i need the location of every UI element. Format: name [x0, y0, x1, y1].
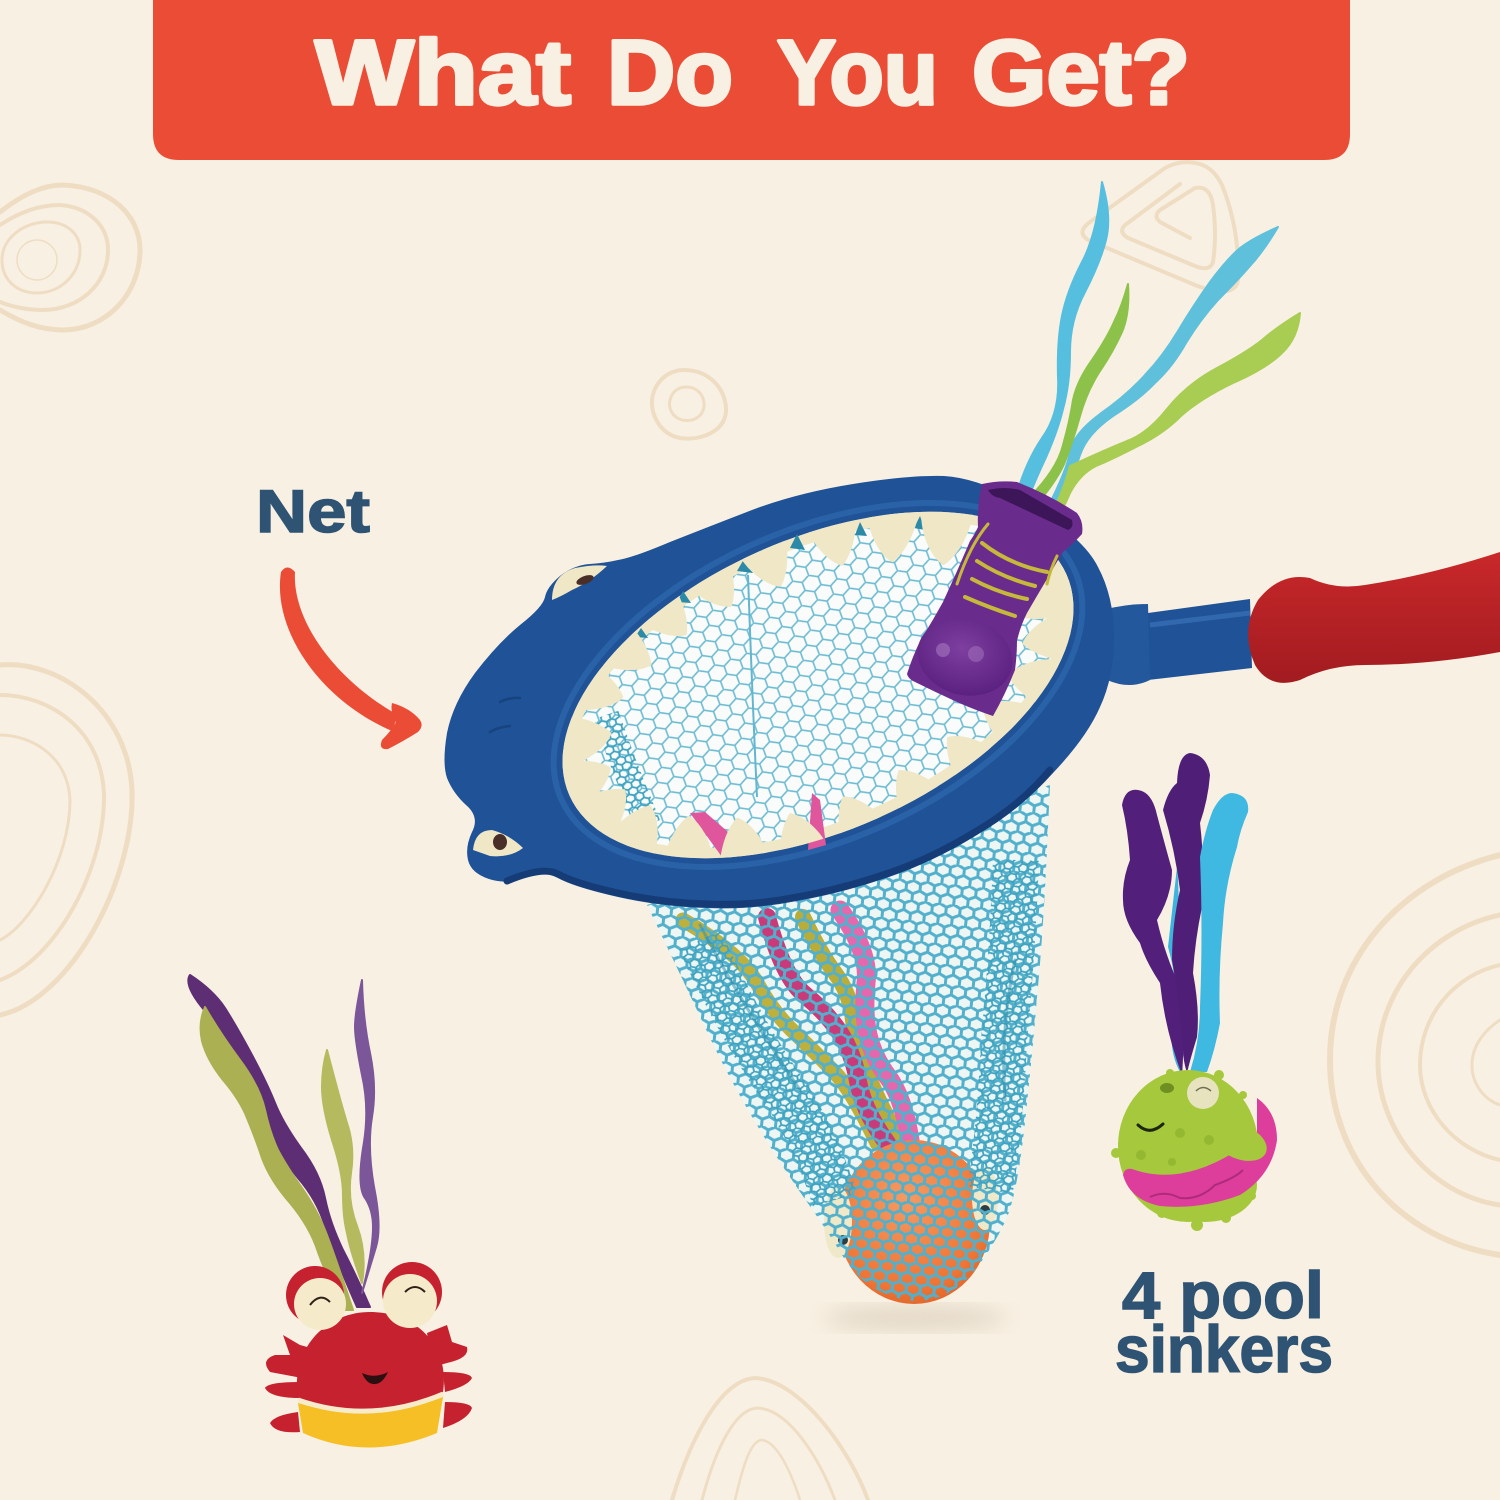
puffer fish sinker	[1111, 753, 1277, 1231]
boot laces	[957, 524, 1057, 616]
label: 4 pool sinkers: 4 pool	[1122, 1258, 1324, 1332]
header banner	[153, 0, 1350, 160]
boot streamers	[1015, 182, 1300, 518]
label: 4 pool sinkers: sinkers	[1115, 1312, 1333, 1386]
handle	[1101, 552, 1500, 685]
crab body	[297, 1312, 444, 1410]
shark ring	[444, 476, 1112, 908]
dense mesh folds	[700, 860, 1016, 1200]
teal gaps between teeth	[635, 516, 925, 638]
crab streamers	[188, 975, 379, 1310]
title: Get?	[972, 22, 1190, 124]
puffer fin	[1208, 1116, 1272, 1168]
puffer bumps	[1136, 1128, 1214, 1166]
teeth	[562, 512, 1074, 858]
snout dots	[490, 698, 520, 732]
boot toe	[909, 608, 1021, 706]
label: net: Net	[256, 478, 370, 545]
boot body	[907, 481, 1082, 716]
hanging mesh bag	[647, 785, 1050, 1304]
label: 4 pool sinkers	[1115, 1258, 1333, 1386]
crab base	[298, 1397, 443, 1448]
inner mesh	[524, 455, 1112, 915]
crab claws and legs	[265, 1325, 472, 1432]
eye bottom	[473, 830, 523, 856]
shark net toy	[444, 429, 1500, 1331]
arrow pointing to net	[280, 568, 422, 749]
crab smile	[362, 1372, 388, 1384]
puffer ring	[1123, 1098, 1277, 1207]
net shadow	[823, 1305, 1007, 1331]
puffer body	[1118, 1070, 1258, 1222]
pink ribbons seen through ring	[690, 793, 826, 857]
title: Do	[607, 22, 733, 124]
boot sinker	[907, 182, 1300, 716]
crab eyes	[286, 1262, 442, 1330]
orange fish ball	[824, 1140, 998, 1304]
eye top	[552, 565, 607, 600]
puffer streamers	[1122, 753, 1248, 1075]
title: What	[315, 22, 571, 124]
title	[315, 22, 1190, 124]
puffer face	[1138, 1077, 1219, 1130]
puffer spikes	[1111, 1069, 1256, 1231]
crab sinker	[188, 975, 472, 1448]
sinkers inside net	[683, 910, 910, 1143]
title: You	[777, 22, 938, 124]
